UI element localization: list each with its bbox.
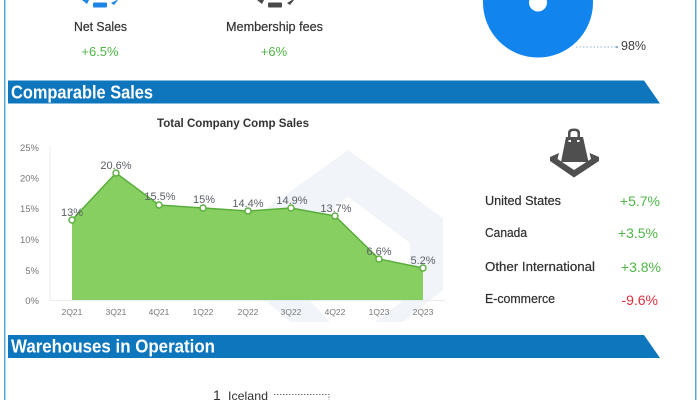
data labels: 13.7% — [320, 203, 352, 215]
line — [72, 173, 423, 268]
row: other international: Other International — [485, 260, 595, 274]
data labels: 5.2% — [410, 255, 436, 267]
data labels — [61, 160, 436, 267]
x axis labels: 3Q22 — [281, 307, 302, 317]
x axis labels: 1Q22 — [193, 307, 214, 317]
x axis labels — [62, 307, 434, 317]
x axis labels: 3Q21 — [106, 307, 127, 317]
row: united states: +5.7% — [620, 193, 660, 209]
donut callout: 98%: 98% — [621, 39, 646, 53]
data labels: 14.9% — [276, 195, 308, 207]
y axis labels — [20, 143, 40, 307]
markers — [69, 170, 426, 271]
heading: comparable sales — [8, 80, 660, 104]
row: iceland — [213, 387, 329, 400]
icon: membership fees — [257, 0, 294, 8]
value: net sales: +6.5% — [81, 44, 119, 59]
green area — [72, 173, 423, 300]
chart title: Total Company Comp Sales — [157, 116, 309, 130]
x axis labels: 2Q21 — [62, 307, 83, 317]
y axis labels: 10% — [20, 235, 40, 246]
data labels: 20.6% — [100, 160, 132, 172]
donut callout: 98% — [576, 39, 646, 53]
data labels: 6.6% — [366, 246, 392, 258]
row: canada: +3.5% — [618, 225, 658, 241]
value: membership fees: +6% — [261, 44, 288, 59]
data labels: 15.5% — [144, 191, 176, 203]
data labels: 13% — [61, 207, 83, 219]
y axis labels: 25% — [20, 143, 40, 154]
row: other international — [485, 259, 661, 275]
heading: warehouses in operation — [8, 335, 660, 358]
y axis labels: 5% — [25, 266, 40, 277]
y axis labels: 15% — [20, 204, 40, 215]
row: canada: Canada — [485, 226, 527, 240]
label: net sales: Net Sales — [74, 20, 127, 34]
data labels: 14.4% — [232, 198, 264, 210]
grid axes — [50, 146, 445, 301]
row: e-commerce: -9.6% — [621, 292, 658, 308]
x axis labels: 4Q22 — [325, 307, 346, 317]
data labels: 15% — [193, 194, 215, 206]
x axis labels: 4Q21 — [149, 307, 170, 317]
icon: shopping bag on tray — [550, 128, 599, 178]
row: canada — [485, 225, 658, 241]
area chart — [20, 143, 445, 317]
row: e-commerce: E-commerce — [485, 292, 555, 306]
donut chart — [483, 0, 593, 58]
icon: net sales — [82, 0, 118, 8]
row: united states: United States — [485, 194, 561, 208]
row: united states — [485, 193, 660, 209]
x axis labels: 1Q23 — [369, 307, 390, 317]
watermark — [253, 150, 443, 322]
row: other international: +3.8% — [621, 259, 661, 275]
label: membership fees: Membership fees — [226, 20, 323, 34]
y axis labels: 20% — [20, 174, 40, 184]
heading: warehouses in operation: Warehouses in Operation — [11, 336, 215, 356]
heading: comparable sales: Comparable Sales — [11, 82, 153, 102]
x axis labels: 2Q22 — [238, 307, 259, 317]
y axis labels: 0% — [25, 296, 40, 307]
row: e-commerce — [485, 292, 658, 308]
x axis labels: 2Q23 — [413, 307, 434, 317]
